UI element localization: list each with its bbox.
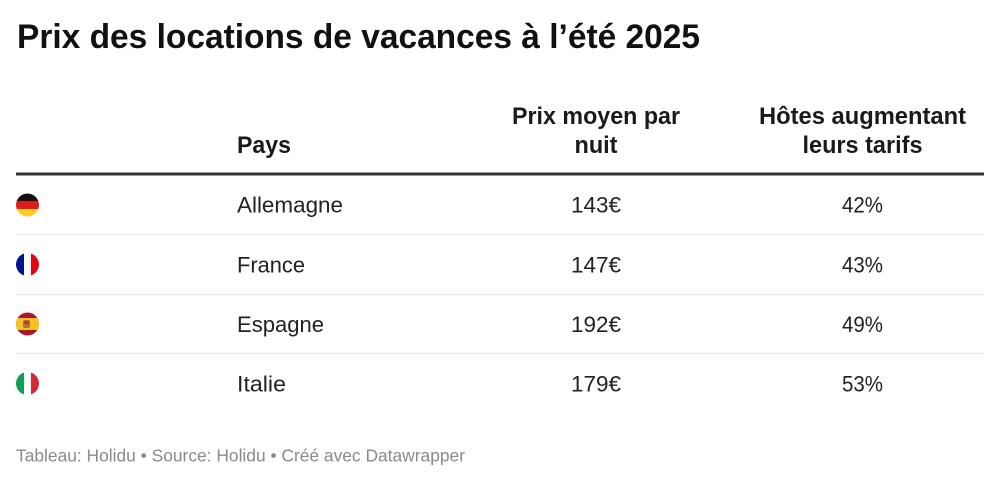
row: Espagne: 49% xyxy=(842,312,883,337)
title: Prix des locations de vacances à l’été 2025 xyxy=(17,18,700,56)
footer source note: Tableau: Holidu • Source: Holidu • Créé avec Datawrapper xyxy=(16,446,465,466)
row: Allemagne: 143€ xyxy=(571,192,621,218)
column header: price: Prix moyen par xyxy=(512,103,680,130)
column header: hosts: leurs tarifs xyxy=(802,132,922,159)
row: Italie xyxy=(16,372,882,394)
column header: hosts: Hôtes augmentant xyxy=(759,103,966,130)
row: France xyxy=(16,254,882,276)
column header: hosts xyxy=(759,103,966,159)
row: France: 147€ xyxy=(571,252,621,277)
row: Espagne xyxy=(16,312,883,337)
row: Allemagne: 42% xyxy=(842,192,883,218)
row: Italie: 179€ xyxy=(571,372,621,396)
row: Espagne: Espagne xyxy=(237,312,324,337)
row: France: 43% xyxy=(842,252,883,277)
header row xyxy=(237,103,966,159)
row: France: France xyxy=(237,252,305,277)
icon: Italian flag xyxy=(16,372,39,395)
row: Allemagne: Allemagne xyxy=(237,192,343,218)
icon: German flag xyxy=(16,193,39,217)
row: Espagne: 192€ xyxy=(571,312,621,337)
column header: price xyxy=(512,103,680,159)
icon: French flag xyxy=(16,253,39,276)
column header: price: nuit xyxy=(574,132,618,159)
row: Italie: Italie xyxy=(237,372,286,396)
row: Italie: 53% xyxy=(842,372,883,396)
icon: Spanish flag xyxy=(16,312,39,336)
row: Allemagne xyxy=(16,192,883,218)
column header: Pays: Pays xyxy=(237,132,291,159)
